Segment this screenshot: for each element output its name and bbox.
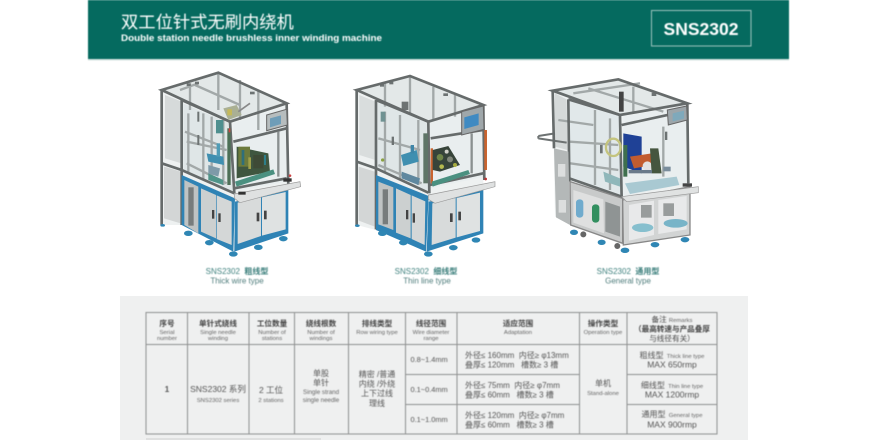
winding mechanism (381, 112, 470, 187)
control screen (267, 109, 287, 131)
table header row: Serial (159, 330, 175, 336)
table body: remarks: MAX 900rmp (647, 420, 697, 430)
control screen (462, 106, 484, 135)
table header row: Number of (307, 330, 335, 336)
table header row: Adaptation (504, 330, 532, 336)
title: 双工位针式无刷内绕机 (121, 12, 294, 32)
table body: wire diameters: 0.1~0.4mm (410, 385, 448, 394)
model number box: SNS2302 (664, 19, 739, 39)
table body: common columns: 理线 (369, 398, 385, 408)
caption: general type: General type (605, 276, 651, 286)
table header row (157, 314, 710, 343)
cabinet side (554, 148, 570, 225)
table header row: 序号 (159, 318, 175, 328)
feet (160, 224, 288, 257)
winding mechanism (603, 92, 679, 194)
table body: wire diameters: 0.1~1.0mm (410, 415, 448, 424)
table body: common columns: 2 stations (258, 398, 284, 404)
table body: common columns: 精密 /普通 (359, 369, 395, 379)
panel: specification background (120, 296, 748, 440)
table header row: 线径范围 (416, 318, 447, 328)
caption: thin line type (395, 266, 457, 286)
table header row: 工位数量 (257, 318, 288, 328)
machine: general type (538, 79, 698, 253)
caption: thick wire type: Thick wire type (210, 276, 264, 286)
table body: remarks: MAX 650rmp (647, 360, 697, 370)
table header row: range (423, 336, 439, 342)
table body: common columns (165, 368, 620, 408)
table body: common columns: Single strand (303, 389, 340, 396)
table body: adaptation (465, 350, 569, 430)
table header row: winding (207, 336, 228, 342)
table header row: Number of (258, 330, 286, 336)
caption: thick wire type (206, 266, 268, 286)
caption: thin line type: Thin line type (403, 276, 451, 286)
table body: common columns: 上下过线 (361, 388, 393, 398)
table header row: stations (262, 336, 282, 342)
table body: remarks: 细线型 Thin line type (641, 380, 704, 390)
title: Double station needle brushless inner winding machine (121, 33, 382, 43)
table header row: 绕线根数 (306, 318, 337, 328)
table body: remarks: 粗线型 Thick line type (640, 350, 705, 360)
table header row: windings (309, 336, 333, 342)
table body: common columns: 1 (165, 385, 170, 394)
table header row: Wire diameter (413, 330, 449, 336)
table header row: 操作类型 (588, 318, 619, 328)
table body: adaptation: 叠厚≤ 120mm 槽数≥ 3 槽 (465, 360, 558, 370)
table body: adaptation: 叠厚≤ 60mm 槽数≥ 3 槽 (465, 420, 554, 430)
cabinet left face (570, 182, 623, 243)
orange guards (431, 130, 487, 183)
table header row: Row wiring type (356, 330, 399, 336)
caption: thin line type: SNS2302 细线型 (395, 266, 457, 276)
machine: thin line type (355, 76, 495, 257)
tray (428, 182, 495, 203)
table body: common columns: SNS2302 series (197, 398, 239, 404)
table header row: （最高转速与产品叠厚 (634, 324, 710, 334)
table body: remarks (640, 350, 705, 430)
table header row: 排线类型 (362, 318, 393, 328)
side shelf (538, 133, 567, 143)
table body: common columns: 单股 (313, 368, 329, 378)
control screen (667, 106, 687, 125)
table body: common columns: 2 工位 (259, 385, 284, 395)
title (121, 12, 382, 43)
table header row: 单针式绕线 (199, 318, 237, 328)
table header row: Single needle (200, 330, 237, 336)
table body: adaptation: 外径≤ 120mm 内径≥ φ7mm (465, 410, 565, 420)
feet (570, 230, 689, 253)
table body: wire diameters: 0.8~1.4mm (410, 355, 448, 364)
feet (355, 224, 480, 257)
caption: general type (597, 266, 659, 286)
table body: adaptation: 外径≤ 75mm 内径≥ φ7mm (465, 380, 560, 390)
specification table (146, 312, 717, 434)
table header row: 与线径有关） (649, 333, 695, 343)
header banner (88, 0, 789, 60)
table body: adaptation: 外径≤ 160mm 内径≥ φ13mm (465, 350, 569, 360)
tray (234, 182, 301, 203)
table body: common columns: 内绕 /外绕 (359, 378, 395, 388)
cabinet left face (182, 175, 235, 252)
table header row: number (157, 336, 177, 342)
table body: adaptation: 叠厚≤ 60mm 槽数≥ 3 槽 (465, 390, 554, 400)
table body: wire diameters (410, 355, 448, 424)
caption: general type: SNS2302 通用型 (597, 266, 659, 276)
winding mechanism (207, 103, 275, 187)
table body: common columns: 单机 (595, 378, 611, 388)
table header row: 备注 Remarks (652, 314, 692, 324)
machine: thick wire type (160, 73, 301, 257)
table header row: 适应范围 (503, 318, 534, 328)
model number box (652, 10, 751, 46)
table body: remarks: 通用型 General type (642, 409, 703, 419)
cabinet right face (427, 190, 483, 252)
table body: remarks: MAX 1200rmp (645, 390, 699, 400)
table body: common columns: 单针 (313, 378, 329, 388)
tray (622, 187, 698, 202)
cabinet left face (376, 175, 429, 252)
table body: common columns: SNS2302 系列 (190, 384, 246, 394)
table header row: Operation type (584, 330, 623, 336)
table body: common columns: single needle (303, 397, 340, 404)
caption: thick wire type: SNS2302 粗线型 (206, 266, 268, 276)
table body: common columns: Stand-alone (587, 391, 620, 397)
cabinet right face (623, 187, 690, 245)
cabinet right face (234, 190, 288, 252)
